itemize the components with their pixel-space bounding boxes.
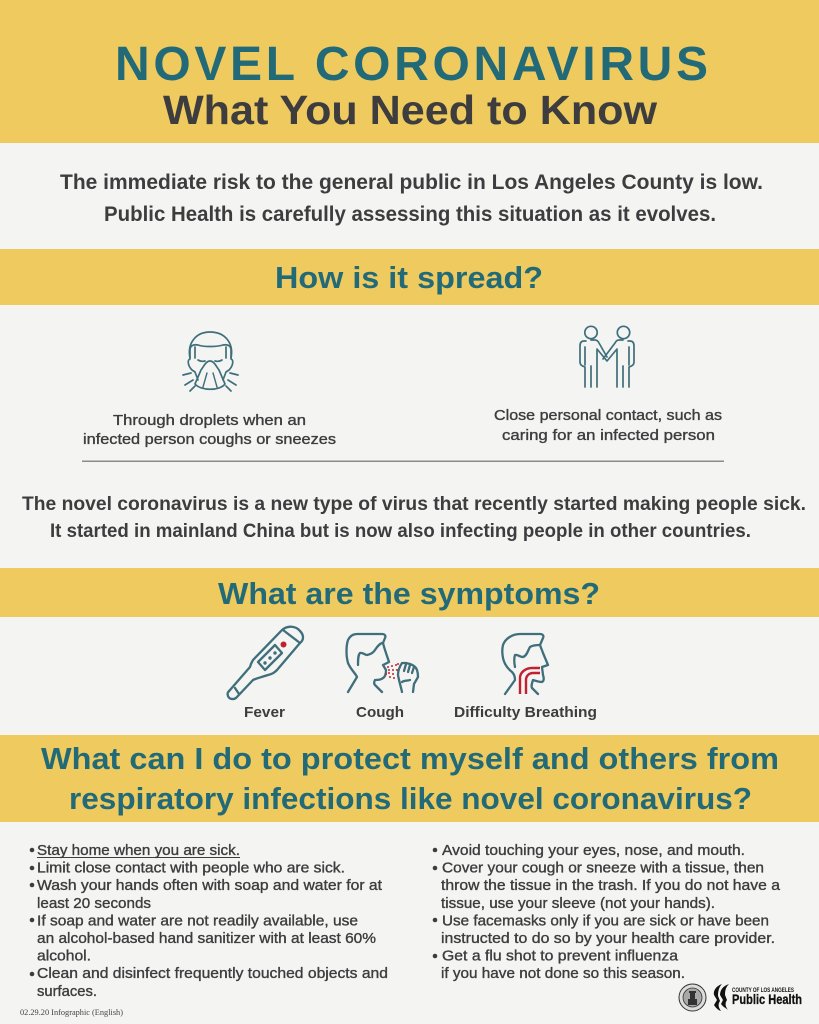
list: right advice column: Use facemasks only if you are sick or have been	[442, 913, 769, 929]
risk statement: The immediate risk to the general public in Los Angeles County is low.	[60, 171, 763, 194]
band: protection heading	[0, 735, 819, 822]
list: right advice column: if you have not done so this season.	[441, 966, 685, 982]
band: symptoms	[0, 568, 819, 617]
footer date note: 02.29.20 Infographic (English)	[20, 1007, 123, 1017]
symptom label: cough: Cough	[356, 704, 404, 721]
list: left advice column: surfaces.	[37, 984, 97, 1000]
spread caption: droplets	[83, 413, 336, 448]
list: left advice column: Clean and disinfect frequently touched objects and	[37, 966, 388, 982]
spread caption: droplets: infected person coughs or sneezes	[83, 432, 336, 448]
list: left advice column: If soap and water are not readily available, use	[37, 913, 358, 929]
subtitle: What You Need to Know	[163, 87, 657, 133]
list: left advice column: alcohol.	[37, 949, 91, 965]
spread caption: close contact: caring for an infected person	[502, 428, 715, 444]
icon: person with difficulty breathing	[502, 634, 548, 694]
header banner	[0, 0, 819, 143]
virus explanation	[22, 494, 806, 542]
list: right advice column: instructed to do so by your health care provider.	[441, 931, 775, 947]
list: left advice column: Stay home when you are sick.	[37, 843, 240, 859]
virus explanation: The novel coronavirus is a new type of virus that recently started making people sick.	[22, 494, 806, 515]
risk statement: Public Health is carefully assessing this situation as it evolves.	[104, 203, 716, 226]
spread caption: close contact	[494, 408, 722, 444]
risk statement	[60, 171, 763, 226]
band: symptoms: What are the symptoms?	[218, 576, 600, 611]
logo: county seal	[679, 984, 706, 1011]
list: right advice column: throw the tissue in the trash. If you do not have a	[441, 878, 781, 894]
list: left advice column: an alcohol-based hand sanitizer with at least 60%	[37, 931, 376, 947]
logo: Public Health: Public Health	[732, 992, 802, 1007]
list: right advice column: Cover your cough or sneeze with a tissue, then	[442, 861, 764, 877]
icon: two people holding hands	[580, 326, 634, 387]
list: left advice column: least 20 seconds	[37, 896, 151, 912]
virus explanation: It started in mainland China but is now also infecting people in other countries.	[50, 521, 751, 542]
title: NOVEL CORONAVIRUS	[115, 38, 708, 91]
symptom label: difficulty breathing: Difficulty Breathing	[454, 704, 597, 721]
band: protection heading: respiratory infections like novel coronavirus?	[69, 781, 752, 816]
list: right advice column	[433, 843, 781, 982]
logo: Public Health: COUNTY OF LOS ANGELES	[732, 988, 794, 994]
list: right advice column: tissue, use your sleeve (not your hands).	[441, 896, 715, 912]
list: left advice column: Limit close contact with people who are sick.	[37, 861, 345, 877]
band: protection heading: What can I do to protect myself and others from	[41, 741, 779, 776]
list: right advice column: Avoid touching your eyes, nose, and mouth.	[442, 843, 745, 859]
symptom label: fever: Fever	[244, 704, 285, 721]
icon: person sneezing into mask	[183, 332, 238, 391]
icon: thermometer	[228, 627, 303, 699]
spread caption: close contact: Close personal contact, such as	[494, 408, 722, 424]
band: how is it spread	[0, 249, 819, 305]
list: left advice column: Wash your hands often with soap and water for at	[37, 878, 382, 894]
list: right advice column: Get a flu shot to prevent influenza	[442, 949, 679, 965]
icon: person coughing	[346, 634, 418, 692]
logo: Public Health	[714, 984, 802, 1011]
list: left advice column	[30, 843, 388, 1000]
spread caption: droplets: Through droplets when an	[113, 413, 306, 429]
band: how is it spread: How is it spread?	[275, 260, 543, 295]
